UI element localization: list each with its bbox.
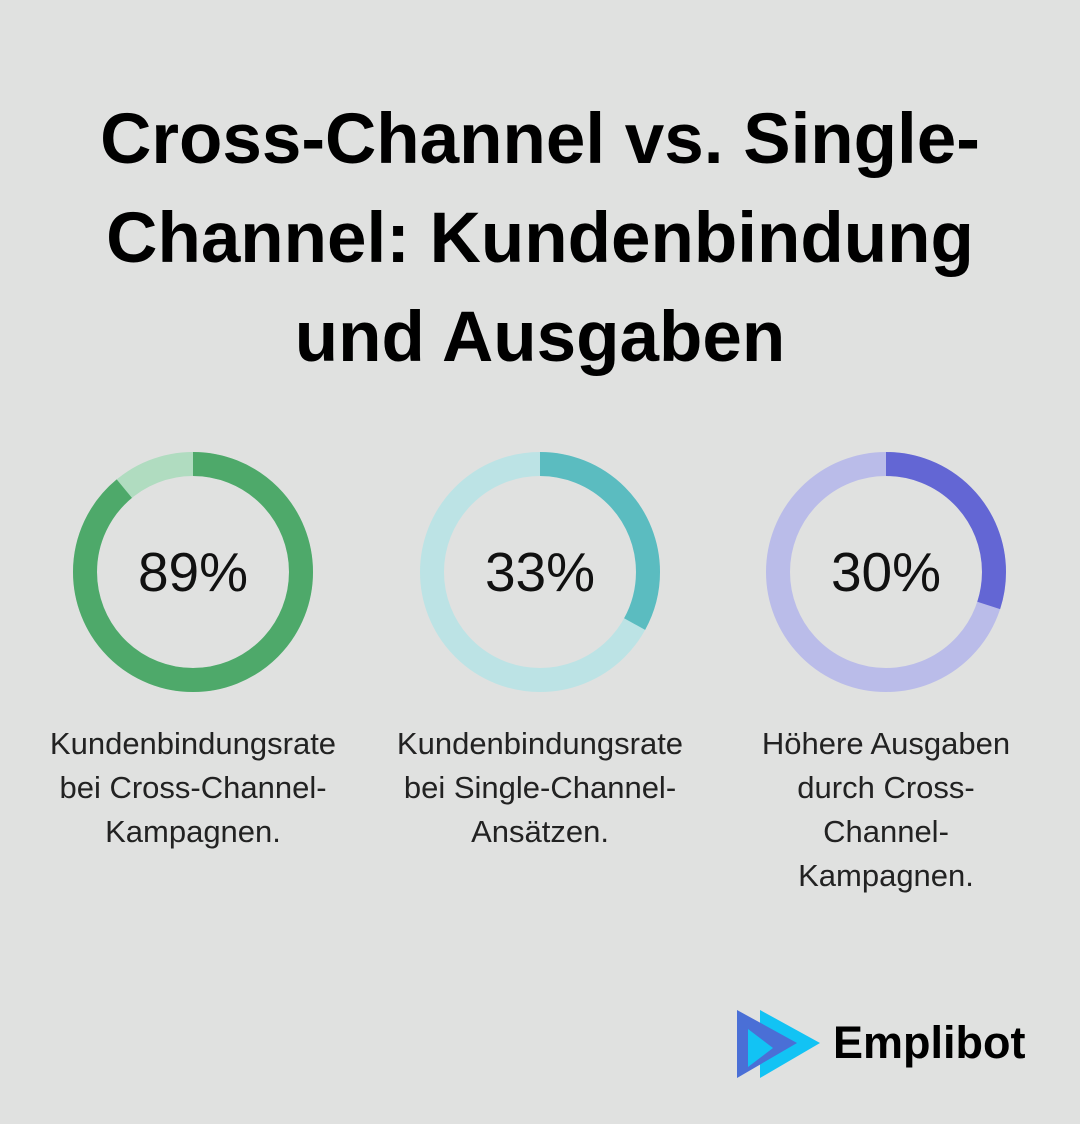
label: 89%: Kundenbindungsrate bei Cross-Channel-Kampagnen. bbox=[50, 726, 336, 849]
title bbox=[100, 100, 980, 377]
ring: 89%: 89% bbox=[138, 541, 248, 603]
ring: 30%: 30% bbox=[831, 541, 941, 603]
ring: 33%: 33% bbox=[485, 541, 595, 603]
title: Cross-Channel vs. Single- bbox=[100, 100, 980, 179]
label: 33%: Kundenbindungsrate bei Single-Channel-Ansätzen. bbox=[397, 726, 683, 849]
ring: 30% bbox=[766, 452, 1006, 692]
title: Channel: Kundenbindung bbox=[106, 199, 974, 278]
logo bbox=[737, 1010, 1025, 1078]
icon: play triangles bbox=[737, 1010, 820, 1078]
ring: 89% bbox=[73, 452, 313, 692]
ring: 33% bbox=[420, 452, 660, 692]
title: und Ausgaben bbox=[295, 298, 785, 377]
label: 30%: Höhere Ausgaben durch Cross-Channel-Kampagnen. bbox=[762, 726, 1010, 893]
logo text: Emplibot bbox=[833, 1017, 1025, 1068]
